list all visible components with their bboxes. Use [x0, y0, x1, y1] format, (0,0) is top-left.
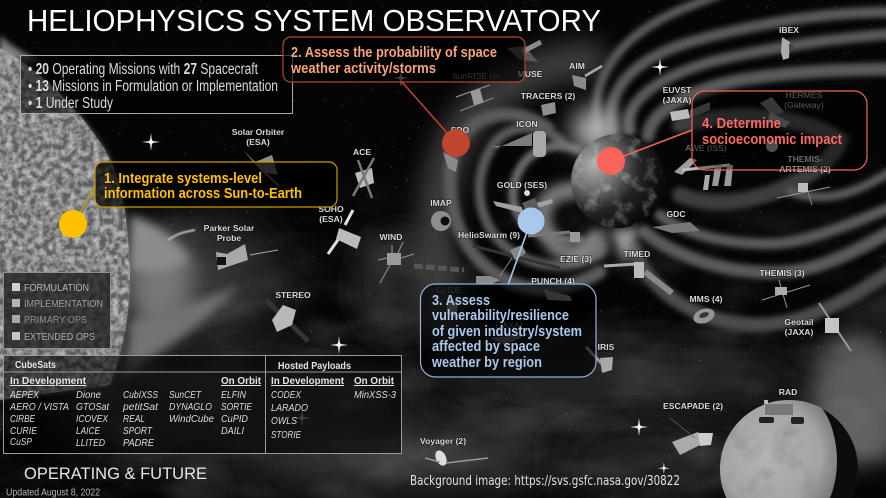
panel: CubeSats and hosted payloads table: GTOSat [76, 401, 110, 413]
satellite: THEMIS-ARTEMIS: THEMIS- [787, 154, 823, 164]
satellite: IRIS: IRIS [598, 342, 615, 352]
satellite: ESCAPADE: ESCAPADE (2) [663, 401, 723, 411]
satellite: MMS: MMS (4) [690, 294, 723, 304]
callout: step 4 [692, 91, 867, 170]
panel: CubeSats and hosted payloads table: DYNAGLO [169, 401, 212, 413]
satellite: GDC [652, 209, 700, 233]
icon: step 2 dot [442, 129, 470, 157]
callout: step 2: weather activity/storms [290, 60, 436, 77]
satellite: EUVST: (JAXA) [663, 95, 691, 105]
arrow: step 3 connector [508, 221, 531, 285]
satellite: MMS [690, 294, 723, 326]
satellite: TRACERS: TRACERS (2) [521, 91, 575, 101]
satellite: Parker Solar Probe: Parker Solar [204, 223, 255, 233]
satellite: THEMIS-ARTEMIS: ARTEMIS (2) [779, 164, 831, 174]
satellite: SOHO: SOHO [318, 204, 344, 214]
legend: IMPLEMENTATION [24, 298, 103, 310]
satellite: SunRISE [452, 71, 500, 111]
satellite: AWE ISS: AWE (ISS) [685, 143, 727, 153]
satellite: EZIE: EZIE (3) [560, 254, 592, 264]
title: HELIOPHYSICS SYSTEM OBSERVATORY [27, 3, 601, 38]
satellite: Parker Solar Probe [204, 223, 278, 270]
satellite: AIM: AIM [569, 61, 585, 71]
satellite: WIND: WIND [380, 232, 402, 242]
text: image credit: Background image: https://svs.gsfc.nasa.gov/30822 [410, 474, 680, 489]
arrow: step 1 connector [73, 187, 95, 224]
panel: CubeSats and hosted payloads table: Dione [76, 389, 101, 401]
satellite: AIM [569, 61, 602, 90]
satellite: EZIE [528, 232, 592, 264]
satellite: IRIS [586, 342, 615, 373]
icon: step 3 dot [518, 208, 544, 234]
satellite: RAD rover: RAD [779, 387, 797, 397]
satellite: MUSE [507, 42, 543, 79]
satellite: ICON: ICON [516, 119, 538, 129]
panel: CubeSats and hosted payloads table: CIRBE [10, 413, 36, 425]
heading: operating and future: OPERATING & FUTURE [24, 464, 207, 483]
panel: CubeSats and hosted payloads table: CURIE [10, 425, 38, 437]
satellite: Geotail [784, 303, 851, 351]
legend: EXTENDED OPS [24, 331, 95, 343]
panel: CubeSats and hosted payloads table: Hosted Payloads [278, 361, 351, 372]
arrow: step 2 connector [402, 82, 456, 143]
satellite: HelioSwarm [458, 230, 560, 285]
callout: step 3: of given industry/system [432, 323, 582, 340]
icon: step 1 dot [59, 210, 87, 238]
callout: step 3: 3. Assess [432, 292, 490, 309]
panel: CubeSats and hosted payloads table: LAICE [76, 425, 101, 437]
panel: CubeSats and hosted payloads table: AERO / VISTA [9, 401, 69, 413]
satellite: Solar Orbiter: (ESA) [246, 137, 270, 147]
panel: mission counts: • 20 Operating Missions with 27 Spacecraft [28, 61, 259, 78]
arrow: step 4 connector [611, 130, 692, 161]
panel: CubeSats and hosted payloads table: PADRE [123, 437, 155, 449]
satellite: HERMES [760, 90, 824, 152]
icon: step 4 dot [597, 147, 625, 175]
panel: CubeSats and hosted payloads table: ELFIN [221, 389, 246, 401]
stars [142, 58, 670, 474]
panel: mission counts: • 13 Missions in Formulation or Implementation [28, 78, 278, 95]
satellite: Solar Orbiter: Solar Orbiter [232, 127, 285, 137]
panel: CubeSats and hosted payloads table: LLITED [76, 437, 105, 449]
legend: PRIMARY OPS [24, 314, 87, 326]
satellite: WIND [378, 232, 464, 283]
satellite: GDC: GDC [666, 209, 686, 219]
callout: step 3 [420, 284, 596, 377]
panel: CubeSats and hosted payloads table: SPORT [123, 425, 153, 437]
panel: CubeSats and hosted payloads table: SunCET [169, 389, 202, 401]
satellite: EUVST: EUVST [663, 85, 692, 95]
panel: CubeSats and hosted payloads table [4, 356, 402, 454]
panel: CubeSats and hosted payloads table: CubeSats [15, 360, 56, 371]
panel: CubeSats and hosted payloads table: OWLS [271, 415, 297, 427]
panel: CubeSats and hosted payloads table: ICOVEX [76, 413, 109, 425]
callout: step 4: 4. Determine [702, 115, 781, 132]
satellite: Parker Solar Probe: Probe [217, 233, 241, 243]
magnetosphere field lines [436, 0, 886, 330]
satellite: TIMED: TIMED [624, 249, 650, 259]
satellite: GOLD: GOLD (SES) [497, 180, 547, 190]
satellite: SunRISE: SunRISE (6) [452, 71, 500, 81]
panel: CubeSats and hosted payloads table: petitSat [122, 401, 159, 413]
satellite: HERMES: (Gateway) [784, 100, 824, 110]
panel: CubeSats and hosted payloads table: On Orbit [221, 376, 262, 387]
satellite: GOLD [493, 180, 553, 214]
satellite: Geotail: Geotail [784, 317, 814, 327]
satellite: Solar Orbiter [232, 127, 285, 186]
satellite: RAD rover [759, 387, 804, 424]
panel: CubeSats and hosted payloads table: In Development [10, 376, 87, 387]
satellite: ACE: ACE [353, 147, 371, 157]
satellite: PUNCH [531, 276, 575, 301]
callout: step 1: information across Sun-to-Earth [104, 185, 302, 202]
callout: step 3: affected by space [432, 338, 540, 355]
callout: step 4: socioeconomic impact [702, 131, 842, 148]
satellite: ICON [492, 119, 546, 157]
callout: step 1 [95, 162, 337, 207]
satellite: MUSE: MUSE [518, 69, 543, 79]
satellite: HelioSwarm: HelioSwarm (9) [458, 230, 520, 240]
panel: CubeSats and hosted payloads table: AEPEX [9, 389, 40, 401]
satellite: STEREO: STEREO [275, 290, 311, 300]
callout: step 2 [283, 37, 525, 82]
panel: CubeSats and hosted payloads table: CODEX [271, 389, 302, 401]
satellite: Geotail: (JAXA) [785, 327, 813, 337]
satellite: IBEX: IBEX [779, 25, 799, 35]
panel: CubeSats and hosted payloads table: CubIXSS [123, 389, 158, 401]
panel: CubeSats and hosted payloads table: CuPID [221, 413, 248, 425]
callout: step 1: 1. Integrate systems-level [104, 170, 262, 187]
satellite: TRACERS [521, 91, 575, 116]
title: HELIOPHYSICS SYSTEM OBSERVATORY [28, 4, 602, 39]
legend: FORMULATION [24, 282, 89, 294]
satellite: THEMIS-ARTEMIS [777, 154, 831, 205]
satellite: ACE [353, 147, 374, 198]
satellite: Voyager: Voyager (2) [420, 436, 466, 446]
panel: CubeSats and hosted payloads table: WindCube [169, 413, 214, 425]
satellite: SOHO [318, 204, 361, 254]
satellite: AWE ISS [674, 143, 733, 190]
satellite: IMAP [430, 198, 452, 231]
satellite: SDO [443, 125, 470, 172]
callout: step 2: 2. Assess the probability of space [291, 44, 497, 61]
satellite: EUVST [663, 85, 710, 121]
panel: CubeSats and hosted payloads table: SORTIE [221, 401, 253, 413]
satellite: PUNCH: PUNCH (4) [531, 276, 575, 286]
satellite: GLIDE [436, 285, 462, 318]
callout: step 3: weather by region [431, 354, 542, 371]
panel: CubeSats and hosted payloads table: MinXSS-3 [354, 389, 396, 401]
satellite: ESCAPADE [663, 401, 723, 455]
panel: CubeSats and hosted payloads table: In Development [271, 376, 345, 387]
satellite: TIMED [604, 249, 672, 293]
panel: mission counts [20, 56, 292, 114]
satellite: Voyager [420, 436, 488, 467]
satellite: JAXA hidden: (JAXA) [495, 320, 523, 330]
callout: step 3: vulnerability/resilience [432, 307, 569, 324]
panel: CubeSats and hosted payloads table: CuSP [10, 436, 32, 448]
satellite: THEMIS [759, 268, 810, 308]
earth [570, 106, 665, 265]
satellite: SOHO: (ESA) [319, 214, 343, 224]
panel: CubeSats and hosted payloads table: STORIE [271, 429, 302, 441]
satellite: HERMES: HERMES [786, 90, 823, 100]
panel: CubeSats and hosted payloads table: REAL [123, 413, 145, 425]
satellite: THEMIS: THEMIS (3) [759, 268, 805, 278]
panel: CubeSats and hosted payloads table: DAILI [221, 425, 244, 437]
satellite: GLIDE: GLIDE [436, 285, 462, 295]
satellite: JAXA hidden [490, 320, 530, 345]
satellite: IMAP: IMAP [430, 198, 452, 208]
mars [720, 400, 858, 498]
satellite: IBEX [779, 25, 799, 60]
panel: CubeSats and hosted payloads table: LARADO [271, 402, 308, 414]
satellite: STEREO [266, 290, 311, 341]
legend [4, 272, 110, 348]
panel: mission counts: • 1 Under Study [28, 95, 113, 112]
sun [0, 0, 240, 400]
panel: CubeSats and hosted payloads table: On Orbit [354, 376, 395, 387]
satellite: SDO: SDO [451, 125, 470, 135]
